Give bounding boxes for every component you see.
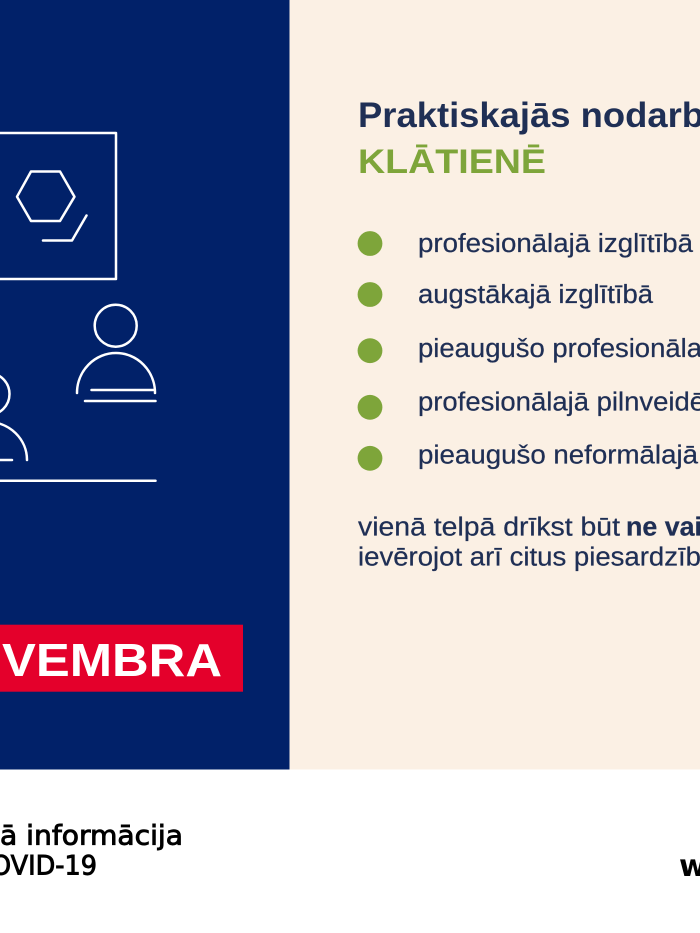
footer text left: ā informācija [0, 820, 183, 852]
note text: ievērojot arī citus piesardzīb [358, 544, 700, 572]
panel: beige information [290, 0, 700, 770]
list item 4 [358, 388, 700, 420]
heading accent: KLĀTIENĒ [358, 143, 546, 181]
list item 1: profesionālajā izglītībā [418, 230, 694, 258]
list item 2: augstākajā izglītībā [418, 281, 654, 309]
list item 3: pieaugušo profesionāla [418, 335, 700, 363]
note text: ne vai [626, 514, 700, 542]
date badge [0, 625, 243, 692]
panel: blue illustration [0, 0, 290, 770]
note text [358, 514, 700, 572]
note text: vienā telpā drīkst būt [358, 514, 620, 542]
date badge: VEMBRA [2, 634, 222, 686]
list item 5: pieaugušo neformālajā [418, 442, 699, 470]
heading: Praktiskajās nodarb [358, 96, 700, 135]
footer text left [0, 820, 183, 882]
table line [0, 479, 156, 482]
icon: person right [77, 305, 156, 401]
list item 4: profesionālajā pilnveidē [418, 388, 700, 416]
icon: presentation board [0, 133, 116, 279]
icon: person left [0, 373, 27, 460]
